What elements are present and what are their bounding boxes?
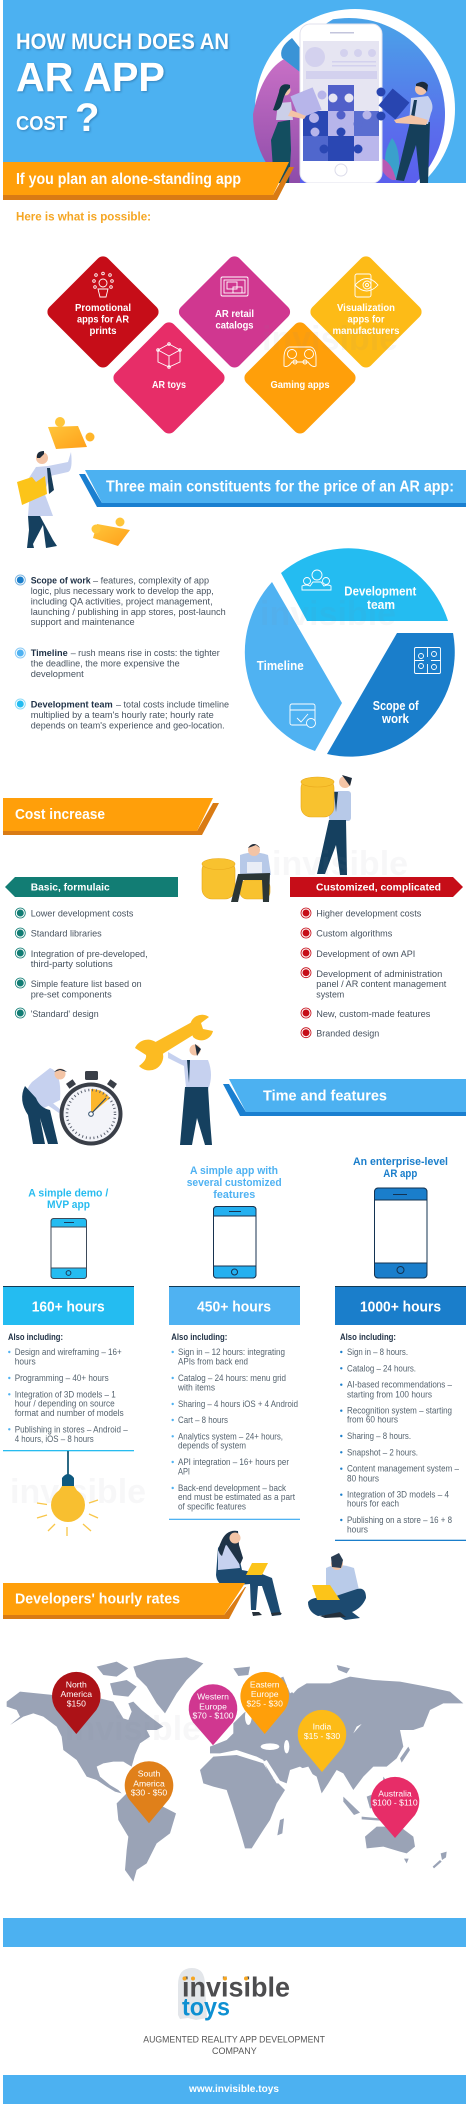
logo: invisible toys xyxy=(178,1968,290,2022)
diamond: retail catalogs: AR retail xyxy=(215,309,254,320)
list: customized features: New, custom-made features xyxy=(316,1009,431,1020)
banner: three main constituents: Three main constituents for the price of an AR app: xyxy=(106,479,454,496)
feature list: hour / depending on source xyxy=(15,1399,115,1409)
banner: three main constituents xyxy=(79,470,466,507)
illustration: man with stopwatch xyxy=(22,1068,123,1146)
heading xyxy=(28,1188,108,1211)
pin: North America: North xyxy=(66,1679,87,1689)
pie chart: price constituents xyxy=(245,548,455,757)
bullet: scope of work: support and maintenance xyxy=(31,617,135,628)
bullet: timeline: Timeline xyxy=(31,648,68,659)
sector: scope of work xyxy=(327,633,455,757)
feature list: from 60 hours xyxy=(347,1415,399,1425)
list: customized features: Higher development costs xyxy=(316,909,422,920)
feature list: Publishing on a store – 16 + 8 xyxy=(347,1515,452,1525)
header panel xyxy=(3,0,466,183)
list: basic features: Standard libraries xyxy=(31,928,102,940)
list: customized features: Branded design xyxy=(316,1029,379,1040)
sector: development team xyxy=(281,548,448,621)
logo: invisible toys: invisible xyxy=(182,1972,290,2003)
feature list: 80 hours xyxy=(347,1473,380,1483)
feature list: Integration of 3D models – 4 xyxy=(347,1490,449,1500)
feature list: Also including: xyxy=(171,1332,227,1342)
bullet: scope of work: – features, complexity of app xyxy=(93,576,209,586)
diamond: promotional apps: Promotional xyxy=(75,303,131,314)
watermark: invisible xyxy=(65,1710,201,1748)
logo: invisible toys: toys xyxy=(182,1994,230,2022)
bullet: timeline: the deadline, the more expensive the xyxy=(31,659,180,670)
column: enterprise-level AR app xyxy=(335,1156,466,1541)
feature list: Sharing – 4 hours iOS + 4 Android xyxy=(178,1399,298,1409)
bullet: timeline: development xyxy=(31,669,84,680)
pin: Eastern Europe: Eastern xyxy=(250,1679,280,1689)
illustration: woman sitting with laptop xyxy=(216,1531,282,1616)
sector: scope of work: work xyxy=(381,712,409,726)
bullet: development team: depends on team's experience and geo-location. xyxy=(31,721,225,732)
feature list: Also including: xyxy=(8,1332,63,1342)
list: basic features xyxy=(15,908,148,1020)
feature list: hours xyxy=(347,1525,369,1535)
heading: MVP app xyxy=(47,1199,90,1211)
hours bar xyxy=(3,1286,134,1325)
feature list: Sign in – 12 hours: integrating xyxy=(178,1347,285,1357)
diamond: AR toys xyxy=(111,319,227,436)
title: AR APP xyxy=(16,54,165,100)
title: HOW MUCH DOES AN xyxy=(16,29,229,54)
heading: features xyxy=(213,1189,255,1201)
illustration: man holding wrench xyxy=(135,1015,213,1145)
pin: Eastern Europe xyxy=(240,1672,289,1734)
diamond: promotional apps: prints xyxy=(90,326,117,337)
bullet: timeline: – rush means rise in costs: the tighter xyxy=(71,648,220,659)
diamond: retail catalogs xyxy=(176,253,293,370)
pin: India: $15 - $30 xyxy=(304,1731,340,1741)
pin: Australia: Australia xyxy=(378,1788,412,1798)
pin: Australia: $100 - $110 xyxy=(372,1798,418,1808)
column: simple demo MVP xyxy=(3,1188,134,1451)
banner: time and features: Time and features xyxy=(263,1089,387,1105)
feature list: of specific features xyxy=(178,1502,247,1512)
feature list: Catalog – 24 hours: menu grid xyxy=(178,1373,286,1383)
icon: large phone xyxy=(374,1188,427,1278)
banner: basic, formulaic: Basic, formulaic xyxy=(31,882,110,894)
heading: A simple demo / xyxy=(28,1188,108,1200)
list: basic features: Simple feature list based on xyxy=(31,979,142,990)
pin: South America xyxy=(125,1761,173,1823)
bullet: development team xyxy=(15,699,229,732)
list: customized features: panel / AR content management xyxy=(316,979,447,990)
pin: Western Europe: Western xyxy=(197,1692,229,1702)
banner: basic, formulaic xyxy=(5,877,178,897)
illustration: standing man carrying coins xyxy=(301,775,352,875)
feature list: Snapshot – 2 hours. xyxy=(347,1447,418,1457)
list: basic features: 'Standard' design xyxy=(31,1009,99,1020)
panel: price constituents list xyxy=(15,575,229,732)
bullet: timeline xyxy=(15,648,220,680)
pin: Western Europe: Europe xyxy=(199,1701,227,1711)
company tagline xyxy=(143,2035,325,2056)
feature list xyxy=(3,1332,134,1451)
feature list: AI-based recommendations – xyxy=(347,1380,452,1390)
banner: customized, complicated: Customized, complicated xyxy=(316,882,441,894)
icon: medium phone xyxy=(214,1206,256,1278)
diamond: visualization apps: Visualization xyxy=(337,303,395,314)
company tagline: AUGMENTED REALITY APP DEVELOPMENT xyxy=(143,2035,325,2045)
banner: alone-standing app: If you plan an alone-standing app xyxy=(16,171,241,188)
hours bar: 450+ hours xyxy=(197,1299,271,1316)
title: ? xyxy=(75,96,99,140)
feature list: Catalog – 24 hours. xyxy=(347,1363,416,1373)
list: customized features: Custom algorithms xyxy=(316,928,393,940)
illustration: man sitting cross-legged with laptop xyxy=(308,1553,366,1620)
feature list: API integration – 16+ hours per xyxy=(178,1457,289,1467)
footer bar: website: www.invisible.toys xyxy=(188,2083,279,2095)
diamond: promotional apps xyxy=(45,253,161,370)
diamond: AR toys: AR toys xyxy=(152,380,186,391)
footer bar: website xyxy=(3,2075,466,2104)
pin: India: India xyxy=(313,1722,332,1732)
title xyxy=(16,29,229,140)
banner: cost increase xyxy=(3,798,219,835)
footer bar: top xyxy=(3,1918,466,1947)
feature list: Publishing in stores – Android – xyxy=(15,1424,128,1434)
diamond: retail catalogs: catalogs xyxy=(216,320,254,332)
feature list xyxy=(335,1332,466,1541)
illustration: seated man on coins xyxy=(202,844,271,902)
list: customized features: Development of own API xyxy=(316,949,415,960)
feature list: Programming – 40+ hours xyxy=(15,1373,109,1383)
watermark: invisible xyxy=(272,845,408,883)
bullet: scope of work xyxy=(15,575,226,628)
heading: several customized xyxy=(187,1177,282,1189)
heading: A simple app with xyxy=(190,1165,278,1177)
sector: scope of work: Scope of xyxy=(373,699,419,713)
feature list: end must be estimated as a part xyxy=(178,1492,296,1502)
diamond: gaming apps xyxy=(242,319,358,436)
bullet: scope of work: logic, plus necessary work to develop the app, xyxy=(31,586,214,597)
column: simple app with customized features xyxy=(169,1165,300,1520)
pin: India xyxy=(298,1710,346,1772)
pin: North America: America xyxy=(61,1689,92,1699)
feature list xyxy=(169,1332,300,1520)
feature list: Back-end development – back xyxy=(178,1483,287,1493)
feature list: starting from 100 hours xyxy=(347,1389,433,1399)
banner: time and features xyxy=(223,1079,466,1116)
feature list: Recognition system – starting xyxy=(347,1406,452,1416)
pin: Eastern Europe: Europe xyxy=(251,1689,279,1699)
diamond: visualization apps: apps for xyxy=(348,315,385,326)
world map xyxy=(7,1657,463,1882)
pin: North America xyxy=(52,1672,101,1734)
hours bar xyxy=(335,1286,466,1325)
subheading: Here is what is possible: xyxy=(16,210,151,224)
feature list: Design and wireframing – 16+ xyxy=(15,1347,122,1357)
watermark: invisible xyxy=(260,595,396,633)
list: basic features: third-party solutions xyxy=(31,959,113,970)
bullet: development team: Development team xyxy=(31,700,113,710)
feature list: Analytics system – 24+ hours, xyxy=(178,1431,283,1441)
hours bar: 160+ hours xyxy=(32,1299,105,1316)
heading: An enterprise-level xyxy=(353,1156,448,1168)
list: basic features: pre-set components xyxy=(31,990,112,1001)
diamond: visualization apps: manufacturers xyxy=(332,326,400,337)
sector: timeline: Timeline xyxy=(257,659,304,673)
feature list: Sign in – 8 hours. xyxy=(347,1347,408,1357)
banner: alone-standing app xyxy=(3,162,294,200)
pin: South America: $30 - $50 xyxy=(131,1788,167,1798)
bullet: development team: multiplied by a team's hourly rate; hourly rate xyxy=(31,710,214,721)
bullet: scope of work: launching / publishing in app stores, post-launch xyxy=(31,607,226,618)
banner: developers' hourly rates xyxy=(3,1583,246,1619)
feature list: Integration of 3D models – 1 xyxy=(15,1389,116,1399)
pin: Australia xyxy=(371,1777,419,1838)
pin: Western Europe xyxy=(189,1684,237,1745)
illustration: man with puzzle pieces xyxy=(17,417,130,548)
feature list: format and number of models xyxy=(15,1408,124,1418)
watermark: invisible xyxy=(10,1473,146,1511)
banner: developers' hourly rates: Developers' hourly rates xyxy=(15,1591,180,1607)
feature list: hours xyxy=(15,1357,36,1367)
heading xyxy=(187,1165,282,1201)
hours bar: 1000+ hours xyxy=(360,1299,441,1316)
sector: development team: team xyxy=(367,598,395,612)
pin: South America: South xyxy=(138,1769,160,1779)
list: customized features xyxy=(301,908,447,1040)
heading: AR app xyxy=(383,1168,418,1180)
icon: stopwatch xyxy=(60,1071,122,1146)
feature list: Also including: xyxy=(340,1332,396,1342)
company tagline: COMPANY xyxy=(212,2046,257,2056)
diamond: promotional apps: apps for AR xyxy=(77,315,129,326)
icon: small phone xyxy=(51,1218,86,1278)
feature list: depends of system xyxy=(178,1441,246,1451)
pin: North America: $150 xyxy=(67,1698,86,1708)
feature list: Cart – 8 hours xyxy=(178,1415,229,1425)
sector: development team: Development xyxy=(344,585,417,599)
bullet: development team: – total costs include timeline xyxy=(116,700,229,710)
feature list: Sharing – 8 hours. xyxy=(347,1431,411,1441)
bullet: scope of work: including QA activities, project management, xyxy=(31,596,213,608)
diamond: gaming apps: Gaming apps xyxy=(270,380,330,391)
diamond: visualization apps xyxy=(308,253,424,370)
banner: customized, complicated xyxy=(290,877,463,897)
pin: South America: America xyxy=(133,1778,165,1788)
feature list: Content management system – xyxy=(347,1464,459,1474)
feature list: hours for each xyxy=(347,1499,399,1509)
list: basic features: Integration of pre-developed, xyxy=(31,949,148,960)
list: customized features: system xyxy=(316,990,344,1001)
watermark: invisible xyxy=(262,320,398,358)
header illustration: phone with puzzle and two people xyxy=(253,9,455,183)
list: basic features: Lower development costs xyxy=(31,909,134,920)
pin: Eastern Europe: $25 - $30 xyxy=(247,1698,283,1708)
feature list: APIs from back end xyxy=(178,1357,248,1367)
pin: Western Europe: $70 - $100 xyxy=(192,1711,234,1721)
sector: timeline xyxy=(245,582,342,751)
list: customized features: Development of administration xyxy=(316,969,442,980)
bullet: scope of work: Scope of work xyxy=(31,576,91,586)
feature list: 4 hours, iOS – 8 hours xyxy=(15,1434,94,1444)
feature list: with items xyxy=(177,1382,216,1392)
panel: app types xyxy=(45,253,424,436)
title: COST xyxy=(16,113,67,135)
hours bar xyxy=(169,1286,300,1325)
icon: light bulb xyxy=(37,1451,98,1536)
feature list: API xyxy=(178,1467,190,1477)
heading xyxy=(353,1156,448,1180)
banner: cost increase: Cost increase xyxy=(15,807,105,823)
